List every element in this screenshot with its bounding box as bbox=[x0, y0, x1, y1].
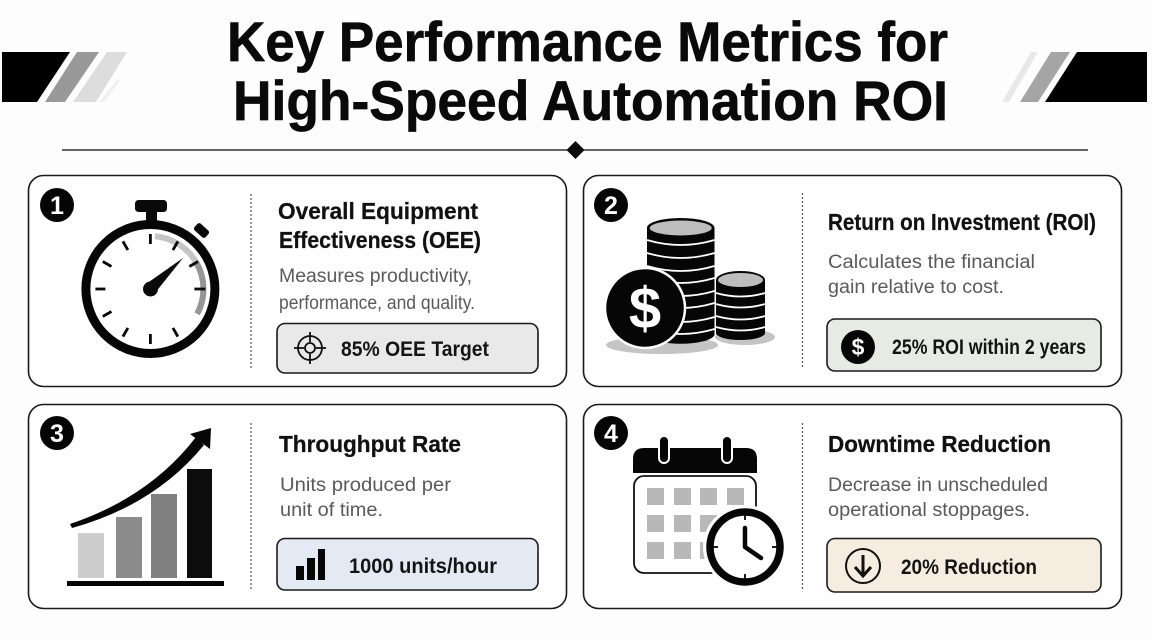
badge: 4: 4 bbox=[604, 420, 618, 448]
text: ROI description bbox=[828, 252, 1035, 298]
callout: 25% ROI within 2 years bbox=[827, 319, 1101, 371]
decoration: left speed stripes bbox=[2, 52, 127, 102]
badge: 2: 2 bbox=[604, 192, 618, 220]
chart: rising bars with arrow bbox=[67, 428, 224, 586]
icon: signal bars bbox=[296, 549, 325, 580]
text: OEE description bbox=[279, 266, 475, 314]
icon: calendar with clock bbox=[633, 436, 787, 589]
callout: 85% OEE Target bbox=[277, 324, 538, 373]
heading: Downtime: Downtime Reduction bbox=[828, 431, 1051, 457]
badge: 3 bbox=[40, 416, 74, 450]
text: Throughput description bbox=[280, 475, 452, 521]
callout: 25% ROI within 2 years: 25% ROI within 2 years bbox=[892, 336, 1086, 359]
text: Throughput description: unit of time. bbox=[280, 500, 383, 521]
icon: dollar circle: $ bbox=[852, 334, 865, 360]
decoration: right speed stripes bbox=[1002, 52, 1147, 102]
text: OEE description: performance, and quality. bbox=[279, 293, 475, 314]
heading: OEE: Effectiveness (OEE) bbox=[279, 227, 481, 253]
badge: 1 bbox=[40, 188, 74, 222]
badge: 1: 1 bbox=[50, 192, 64, 220]
text: OEE description: Measures productivity, bbox=[279, 266, 472, 287]
icon: down arrow circle bbox=[846, 549, 880, 583]
icon: dollar circle bbox=[841, 330, 875, 364]
text: ROI description: gain relative to cost. bbox=[828, 277, 1004, 298]
title: Key Performance Metrics for bbox=[227, 10, 948, 73]
callout: 20% Reduction: 20% Reduction bbox=[901, 556, 1037, 579]
title: High-Speed Automation ROI bbox=[233, 69, 948, 132]
callout: 85% OEE Target: 85% OEE Target bbox=[341, 338, 489, 361]
icon: coin stacks: $ bbox=[629, 276, 661, 341]
header divider with diamond bbox=[62, 141, 1088, 159]
heading: Throughput: Throughput Rate bbox=[279, 431, 461, 457]
text: Downtime description bbox=[828, 475, 1048, 521]
callout: 20% Reduction bbox=[827, 538, 1101, 592]
panel: ROI bbox=[584, 176, 1122, 386]
panel: Downtime bbox=[584, 404, 1122, 608]
text: Throughput description: Units produced per bbox=[280, 475, 452, 496]
heading: ROI: Return on Investment (ROI) bbox=[828, 209, 1096, 235]
text: Downtime description: operational stoppages. bbox=[828, 500, 1030, 521]
heading: OEE bbox=[278, 198, 481, 253]
callout: 1000 units/hour: 1000 units/hour bbox=[349, 555, 497, 578]
panel: Throughput bbox=[28, 404, 566, 608]
badge: 4 bbox=[594, 416, 628, 450]
heading: OEE: Overall Equipment bbox=[278, 198, 478, 224]
title bbox=[227, 10, 948, 132]
icon: coin stacks bbox=[605, 218, 775, 354]
icon: target bbox=[294, 332, 326, 364]
callout: 1000 units/hour bbox=[277, 538, 538, 590]
text: Downtime description: Decrease in unscheduled bbox=[828, 475, 1048, 496]
text: ROI description: Calculates the financial bbox=[828, 252, 1035, 273]
badge: 3: 3 bbox=[50, 420, 64, 448]
icon: stopwatch bbox=[86, 200, 215, 354]
panel: OEE bbox=[28, 176, 566, 386]
badge: 2 bbox=[594, 188, 628, 222]
